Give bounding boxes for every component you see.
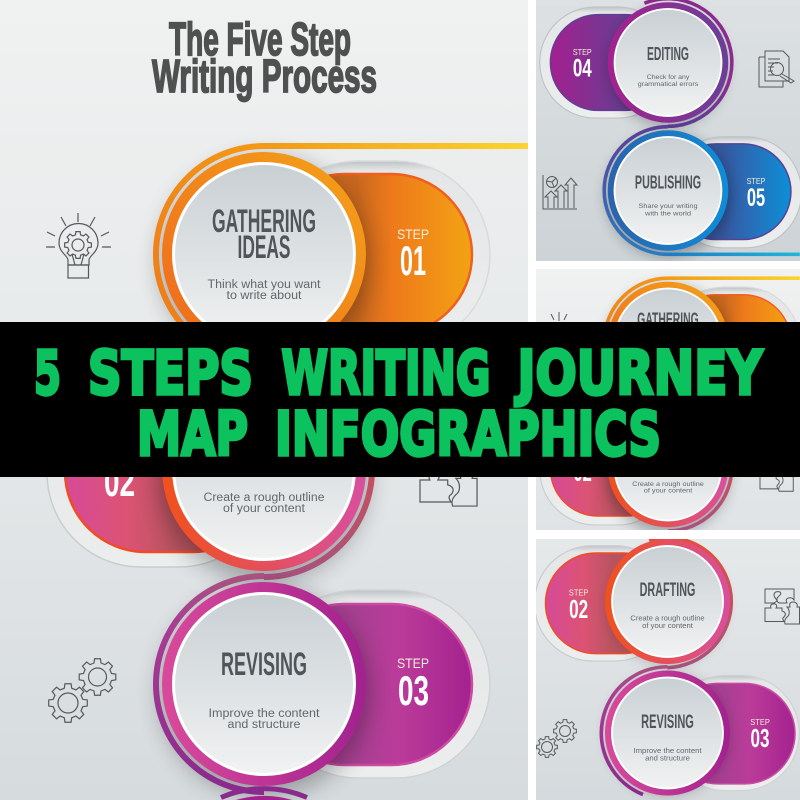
step 1 preview [604, 276, 800, 322]
step 3: revising: STEP [750, 717, 770, 727]
step 2: drafting [534, 538, 731, 668]
step 2: drafting: STEP [569, 587, 589, 597]
banner headline: 5 [34, 338, 61, 409]
step 5: publishing: PUBLISHING [635, 173, 701, 194]
banner headline: INFOGRAPHICS [275, 399, 661, 470]
icon: puzzle pieces [765, 589, 800, 624]
step 3: revising [601, 667, 799, 794]
step 2: drafting: of your content [223, 503, 306, 515]
step 2 preview [540, 477, 737, 530]
step 4 rings peek [221, 789, 307, 800]
step 4: editing: EDITING [647, 44, 689, 65]
banner [0, 322, 800, 477]
step 3: revising: Improve the content [633, 748, 702, 755]
icon: gears [537, 720, 576, 757]
icon: light bulb with gear [46, 213, 111, 278]
banner headline: STEPS [88, 338, 253, 409]
step 3: revising: Improve the content [208, 708, 320, 720]
step 3: revising: and structure [645, 756, 690, 763]
step 1: gathering ideas: Think what you want [208, 279, 321, 291]
step 5: publishing: with the world [644, 210, 691, 217]
step 3: revising: REVISING [641, 711, 694, 733]
panel: editing and publishing [536, 0, 800, 261]
banner headline: MAP [137, 399, 248, 470]
step 2 preview: of your content [644, 487, 692, 494]
icon: bulb rays preview [551, 312, 567, 321]
banner headline: WRITING [282, 338, 490, 409]
icon: puzzle pieces [419, 477, 478, 507]
icon: document with magnifier [759, 51, 794, 87]
step 5: publishing: STEP [747, 177, 766, 186]
step 2 preview: Create a rough outline [632, 481, 704, 488]
step 2 preview: 02 [573, 460, 592, 487]
step 4: editing: Check for any [647, 74, 690, 81]
step 2: drafting: Create a rough outline [204, 492, 324, 504]
step 1: gathering ideas: IDEAS [238, 229, 290, 265]
panel: drafting and revising [534, 538, 800, 800]
icon: gears [49, 659, 116, 722]
step 2: drafting: 02 [569, 596, 588, 624]
step 1: gathering ideas [147, 143, 528, 322]
step 5: publishing: Share your writing [638, 203, 698, 210]
step 3: revising [156, 576, 490, 796]
step 1: gathering ideas: to write about [226, 290, 302, 302]
step 2: drafting [46, 477, 381, 588]
step 2: drafting: DRAFTING [640, 579, 695, 601]
icon: growth chart [543, 175, 577, 209]
step 3: revising: 03 [751, 725, 770, 753]
panel: main infographic [0, 0, 528, 800]
title [152, 13, 377, 102]
step 1: gathering ideas: GATHERING [212, 203, 316, 239]
step 4: editing: 04 [573, 56, 592, 83]
panel: gathering and drafting preview [536, 269, 800, 533]
step 5: publishing [604, 127, 800, 257]
step 4: editing [540, 0, 732, 126]
step 4: editing: STEP [573, 48, 592, 57]
step 4: editing: grammatical errors [638, 81, 699, 88]
step 1 preview: GATHERING [637, 309, 699, 330]
step 3: revising: STEP [397, 655, 429, 671]
step 2: drafting: 02 [104, 458, 135, 505]
step 1: gathering ideas: STEP [397, 226, 429, 242]
step 3: revising: and structure [228, 719, 300, 731]
title: Writing Process [152, 50, 377, 102]
step 2: drafting: of your content [642, 623, 693, 630]
step 2: drafting: Create a rough outline [630, 616, 705, 623]
title: The Five Step [169, 13, 351, 65]
step 1: gathering ideas: 01 [400, 237, 426, 284]
step 3: revising: 03 [398, 667, 429, 714]
banner headline [34, 338, 763, 470]
icon: puzzle preview [760, 477, 794, 492]
step 3: revising: REVISING [221, 646, 307, 682]
step 5: publishing: 05 [747, 185, 765, 212]
